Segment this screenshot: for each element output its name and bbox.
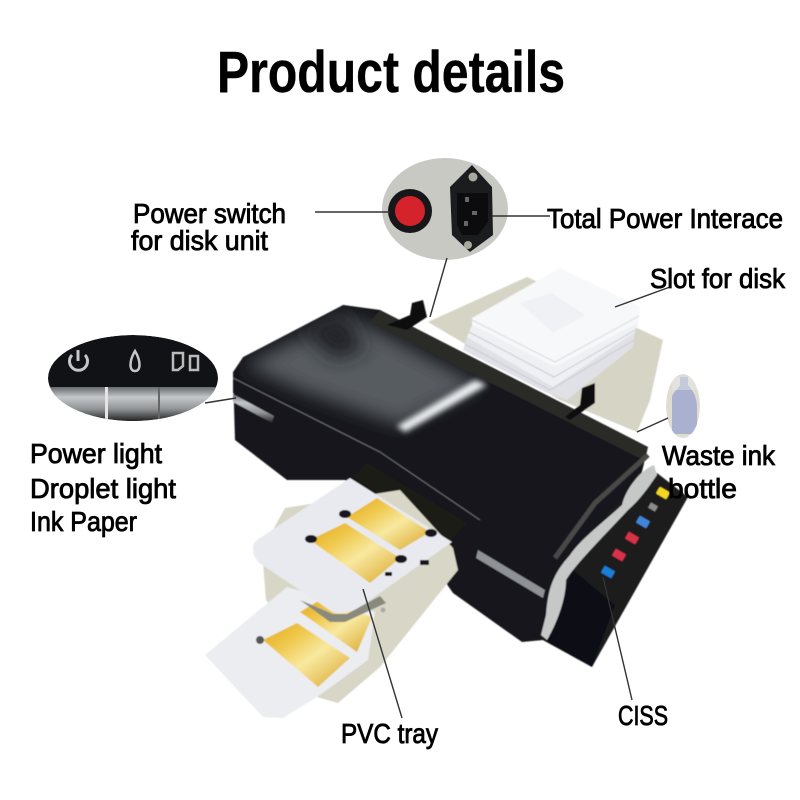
leader lines xyxy=(205,212,670,718)
inset: indicator lights xyxy=(48,335,218,421)
upper gold card left xyxy=(310,523,400,583)
icon: power xyxy=(70,350,88,370)
lower front silver strip xyxy=(476,550,545,598)
upper white tray xyxy=(253,478,452,614)
left paper lever xyxy=(387,300,427,330)
printer front panel strip xyxy=(233,394,274,423)
icon: red power switch xyxy=(388,189,432,233)
label: CISS: CISS xyxy=(618,700,668,731)
inset: power switch and socket xyxy=(382,158,508,260)
label: waste ink bottle: bottle xyxy=(668,473,737,504)
label: PVC tray: PVC tray xyxy=(341,718,438,749)
tray notches xyxy=(305,510,437,576)
label: indicator lights: Ink Paper xyxy=(30,506,137,537)
cover light reflection xyxy=(397,380,487,432)
label: slot for disk: Slot for disk xyxy=(650,263,786,294)
upper gold card right xyxy=(347,498,430,550)
CISS ink buttons xyxy=(601,487,670,578)
shadow under upper tray xyxy=(300,596,386,622)
label: power switch: Power switch xyxy=(133,198,286,229)
label: indicator lights: Droplet light xyxy=(30,473,176,504)
stack of white disk trays xyxy=(463,268,640,400)
cover right lip xyxy=(555,455,648,558)
label: power switch: for disk unit xyxy=(131,225,268,256)
label: indicator lights xyxy=(30,438,176,537)
lower white tray xyxy=(205,587,375,718)
cover front lip xyxy=(233,378,480,520)
lower printer body xyxy=(233,305,648,642)
lower gold card left xyxy=(263,623,350,687)
label: waste ink bottle: Waste ink xyxy=(662,440,776,471)
paper output slot xyxy=(353,463,467,540)
rear tan disk unit xyxy=(428,277,663,432)
icon: paper and bin xyxy=(173,353,198,370)
lower gold card right xyxy=(300,600,372,652)
label: power switch xyxy=(131,198,286,256)
lower tan tray holder xyxy=(262,490,458,703)
label: total power: Total Power Interace xyxy=(547,203,783,234)
CISS ink unit xyxy=(543,473,688,667)
title: Product details xyxy=(217,40,565,105)
icon: droplet xyxy=(130,351,140,371)
inset: waste ink bottle xyxy=(666,374,700,438)
icon: power socket xyxy=(450,165,493,252)
right paper lever xyxy=(565,383,595,420)
label: indicator lights: Power light xyxy=(30,438,162,469)
label: waste ink bottle xyxy=(662,440,776,504)
CISS tubing band xyxy=(541,465,657,640)
glossy printer top cover xyxy=(232,304,648,458)
printer illustration xyxy=(205,268,688,718)
